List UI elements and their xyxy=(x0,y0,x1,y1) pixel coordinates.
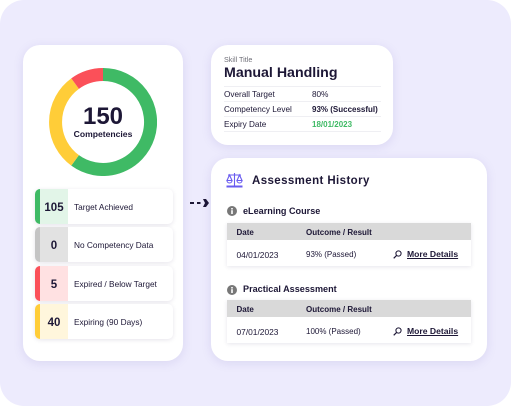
table: elearning: Date xyxy=(236,228,254,236)
table: elearning xyxy=(227,223,471,266)
status: expiring: 40 xyxy=(48,317,60,329)
section title: practical: Practical Assessment xyxy=(243,284,337,294)
table: practical: 100% (Passed) xyxy=(306,327,361,336)
status: target achieved: Target Achieved xyxy=(74,202,133,212)
total number: 150 xyxy=(83,103,123,130)
divider lines xyxy=(224,86,381,132)
heading: Assessment History xyxy=(252,174,370,186)
table: elearning: 04/01/2023 xyxy=(236,250,278,260)
status: expired below target: Expired / Below Target xyxy=(74,279,157,289)
status: expiring xyxy=(35,304,173,339)
expiry date: Expiry Date xyxy=(224,120,266,129)
arrow xyxy=(190,199,209,207)
status: no competency data: No Competency Data xyxy=(74,240,153,250)
table: practical xyxy=(227,300,471,343)
status: target achieved: 105 xyxy=(44,202,64,214)
status: expiring: Expiring (90 Days) xyxy=(74,317,142,327)
total label: Competencies xyxy=(74,128,132,138)
status: target achieved xyxy=(35,189,173,224)
panel: assessment history xyxy=(211,158,487,361)
table: elearning: More Details xyxy=(407,248,458,258)
competency level value: 93% (Successful) xyxy=(312,104,378,114)
expiry date value: 18/01/2023 xyxy=(312,120,352,129)
competency level: Competency Level xyxy=(224,104,292,114)
panel: competencies xyxy=(23,45,183,361)
status: expired below target xyxy=(35,266,173,301)
status: no competency data: 0 xyxy=(51,240,57,252)
table: elearning: 93% (Passed) xyxy=(306,250,356,259)
status: expired below target: 5 xyxy=(51,279,57,291)
overall target: Overall Target xyxy=(224,90,275,98)
panel: skill summary xyxy=(211,45,393,145)
status: no competency data xyxy=(35,227,173,262)
icon: info xyxy=(227,206,237,216)
section title: elearning: eLearning Course xyxy=(243,206,320,216)
icon: scales xyxy=(226,173,243,188)
skill title: Manual Handling xyxy=(224,65,338,81)
table: elearning: Outcome / Result xyxy=(306,228,372,236)
overall target value: 80% xyxy=(312,90,328,98)
table: practical: Outcome / Result xyxy=(306,305,372,314)
table: practical: Date xyxy=(236,305,254,314)
table: practical: 07/01/2023 xyxy=(236,327,278,337)
skill title label: Skill Title xyxy=(224,55,252,64)
icon: info xyxy=(227,285,237,295)
donut chart xyxy=(49,68,157,176)
table: practical: More Details xyxy=(407,326,458,336)
